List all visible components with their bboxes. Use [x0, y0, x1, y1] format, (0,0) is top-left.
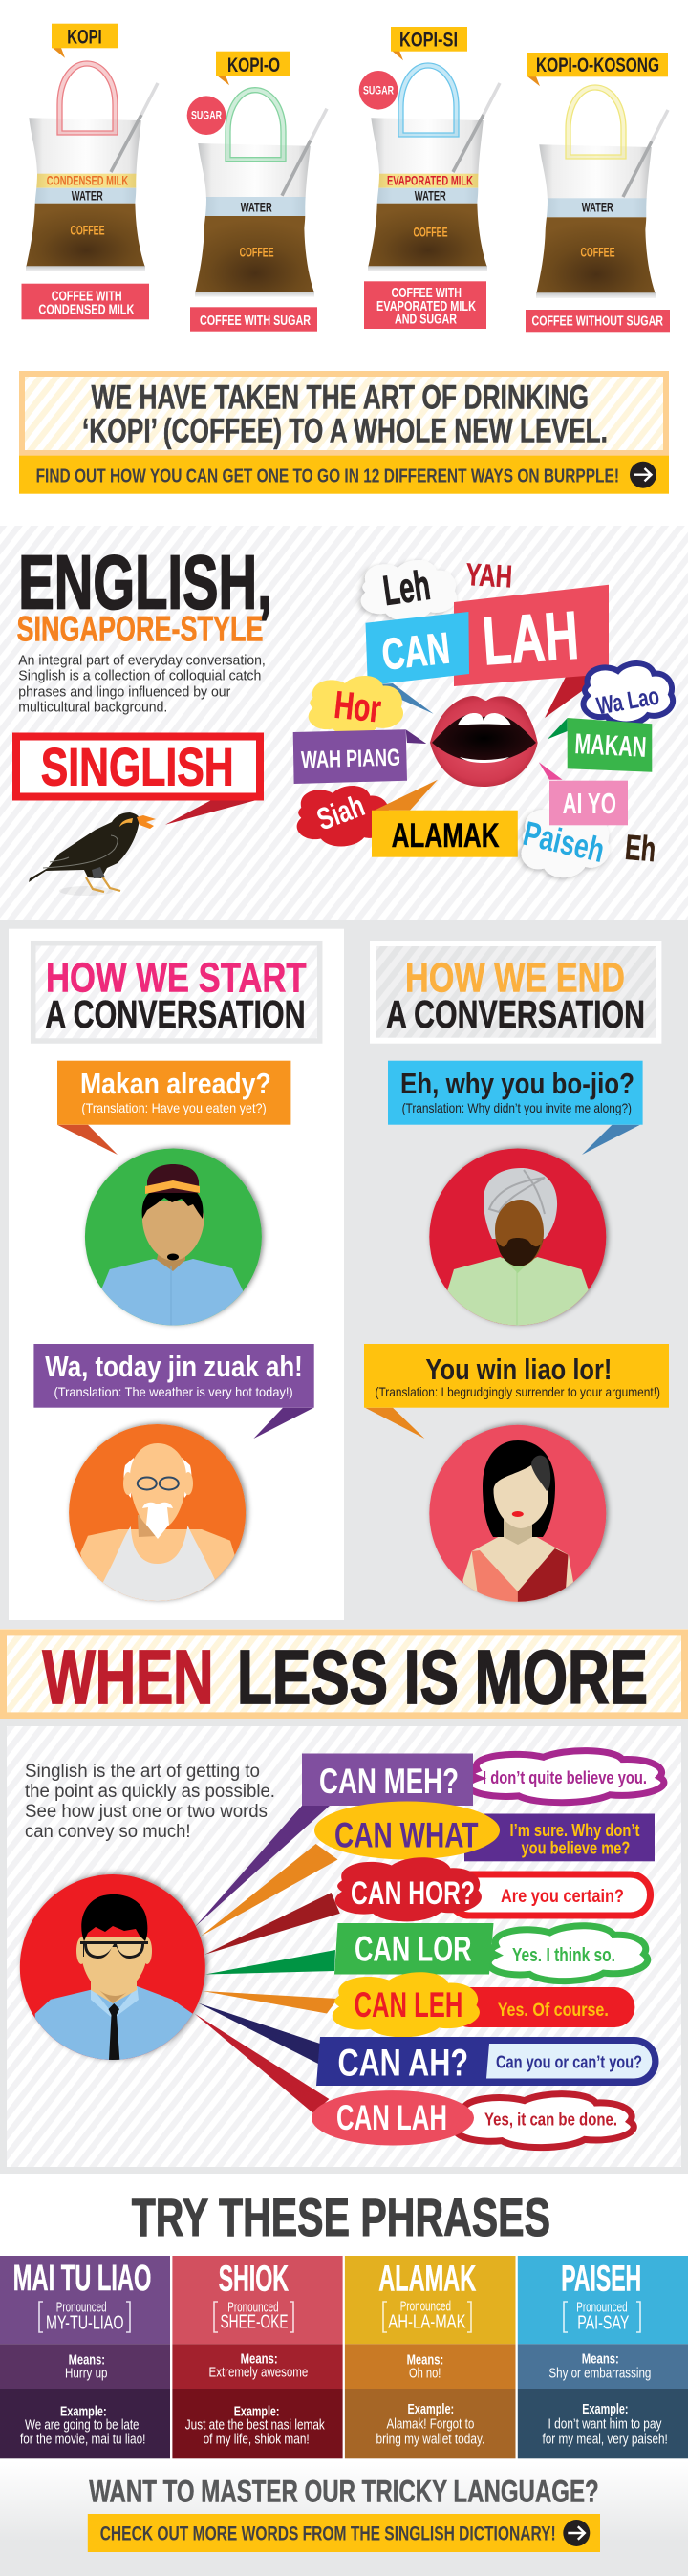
- phrase card: alamak: Alamak! Forgot to: [386, 2416, 474, 2433]
- heading: HOW WE START: [46, 954, 307, 1001]
- icon: myna bird: [29, 812, 156, 896]
- phrase card: mai tu liao: [0, 2256, 170, 2458]
- phrase: can ah: Can you or can’t you?: [496, 2053, 642, 2072]
- phrase card: shiok: Example:: [234, 2403, 279, 2419]
- phrase card: paiseh: PAI-SAY: [577, 2313, 629, 2334]
- icon: mouth: [430, 696, 538, 787]
- speech bubble: you win liao lor: [364, 1344, 669, 1439]
- phrase card: alamak: AH-LA-MAK: [388, 2312, 466, 2333]
- phrase card: mai tu liao: MAI TU LIAO: [13, 2259, 151, 2299]
- phrase: can leh: Yes. Of course.: [498, 2001, 609, 2021]
- phrase: can lor: CAN LOR: [355, 1930, 472, 1969]
- phrase: can meh: [302, 1751, 664, 1806]
- kopi drink: kopi-si: [359, 27, 500, 329]
- phrase: can ah: CAN AH?: [338, 2043, 468, 2085]
- portrait: woman: [429, 1425, 606, 1615]
- cloud: paiseh: [520, 805, 610, 877]
- panel: conversation background: [0, 920, 688, 1629]
- speech bubble: why you bo-jio: (Translation: Why didn’t you invite me along?): [402, 1100, 632, 1115]
- phrase card: shiok: SHIOK: [219, 2260, 289, 2300]
- box: wah piang: WAH PIANG: [301, 745, 400, 773]
- panel: how we end a conversation: [364, 943, 669, 1615]
- intro text: the point as quickly as possible.: [25, 1782, 275, 1802]
- tag: kopi-si: [391, 27, 467, 60]
- layer labels: EVAPORATED MILK: [387, 174, 473, 187]
- box: lah: [454, 585, 609, 718]
- cloud: wa lao: [583, 663, 673, 724]
- phrase card: paiseh: [518, 2256, 688, 2458]
- layer labels: WATER: [241, 201, 272, 214]
- speech bubble: wa today jin zuak ah: [33, 1344, 314, 1439]
- intro text: multicultural background.: [18, 700, 167, 715]
- tag: kopi: [52, 24, 118, 58]
- phrase card: mai tu liao: Hurry up: [65, 2365, 107, 2381]
- layer labels: COFFEE: [581, 245, 615, 260]
- word: eh: Eh: [623, 828, 657, 869]
- title: [17, 540, 272, 649]
- layer labels: WATER: [415, 189, 446, 203]
- headline: [42, 1634, 648, 1720]
- footer: [0, 2461, 688, 2576]
- phrase: can lor: [334, 1923, 648, 1981]
- icon: arrow: [630, 462, 656, 488]
- phrase card: paiseh: I don’t want him to pay: [548, 2416, 662, 2433]
- intro text: [25, 1762, 275, 1842]
- panel: how we start a conversation: [9, 929, 344, 1620]
- sugar: SUGAR: [191, 109, 222, 122]
- phrase card: mai tu liao: for the movie, mai tu liao!: [20, 2432, 145, 2448]
- phrase card: shiok: Extremely awesome: [208, 2365, 308, 2381]
- phrase: can meh: CAN MEH?: [319, 1762, 459, 1801]
- bag: [368, 83, 500, 271]
- cloud: hor: Hor: [333, 684, 383, 730]
- phrase card: paiseh: Example:: [582, 2401, 629, 2417]
- handle: [57, 61, 118, 135]
- cloud: leh: Leh: [380, 562, 433, 615]
- kopi drink: kopi-o: [187, 52, 327, 332]
- phrase card: shiok: Means:: [241, 2350, 278, 2367]
- phrase card: alamak: ALAMAK: [378, 2260, 477, 2300]
- phrase card: alamak: [345, 2256, 516, 2458]
- title: ENGLISH,: [18, 540, 272, 625]
- panel: english singapore-style: [0, 526, 688, 920]
- phrase: can what: I’m sure. Why don’t: [510, 1821, 639, 1840]
- call to action: [88, 2514, 600, 2552]
- phrase: can lah: Yes, it can be done.: [484, 2111, 617, 2130]
- layer labels: CONDENSED MILK: [47, 174, 128, 187]
- caption: COFFEE WITH SUGAR: [200, 314, 311, 329]
- sugar: SUGAR: [363, 83, 394, 97]
- phrase: can what: CAN WHAT: [334, 1816, 479, 1855]
- sugar: [359, 71, 398, 110]
- box: ai yo: [539, 762, 628, 825]
- speech bubble: why you bo-jio: [388, 1061, 643, 1155]
- phrase card: paiseh: Means:: [582, 2350, 619, 2367]
- phrase: can hor: [335, 1857, 650, 1921]
- box: makan: [548, 718, 652, 772]
- phrase card: alamak: Means:: [407, 2351, 443, 2368]
- intro text: Singlish is the art of getting to: [25, 1762, 260, 1782]
- box: makan: MAKAN: [574, 728, 647, 764]
- heading: try these phrases: TRY THESE PHRASES: [132, 2187, 550, 2247]
- phrase card: shiok: Just ate the best nasi lemak: [185, 2417, 325, 2434]
- layer labels: COFFEE: [413, 226, 447, 239]
- sugar: [187, 96, 226, 135]
- intro text: [18, 654, 266, 715]
- phrase: can leh: CAN LEH: [354, 1985, 462, 2024]
- phrase: can lor: Yes. I think so.: [512, 1945, 615, 1966]
- cloud: siah: Siah: [312, 788, 369, 836]
- intro text: Singlish is a collection of colloquial catch: [18, 669, 261, 684]
- box: can: [365, 612, 469, 714]
- kopi drink: kopi: [21, 24, 158, 319]
- portrait: man with turban: [429, 1149, 606, 1329]
- box: lah: LAH: [481, 598, 581, 680]
- heading: HOW WE END: [405, 954, 625, 1001]
- cloud: hor: [309, 676, 403, 736]
- tag: kopi-si: KOPI-SI: [399, 29, 458, 51]
- box: can: CAN: [379, 622, 452, 680]
- handle: [398, 63, 459, 137]
- box: alamak: ALAMAK: [392, 817, 500, 855]
- caption: COFFEE WITH: [52, 289, 122, 304]
- phrase: can ah: [316, 2037, 659, 2086]
- speech bubble: makan already: (Translation: Have you eaten yet?): [81, 1100, 267, 1115]
- layer labels: [581, 201, 615, 260]
- call to action: [19, 456, 669, 494]
- tag: kopi: KOPI: [67, 27, 102, 49]
- handle: [566, 85, 626, 159]
- phrase card: alamak: Pronounced: [400, 2299, 451, 2315]
- phrase card: mai tu liao: We are going to be late: [25, 2417, 140, 2434]
- banner headline: [82, 379, 608, 450]
- phrase card: alamak: Example:: [407, 2401, 454, 2417]
- phrase: can what: [314, 1801, 655, 1861]
- box: wah piang: [293, 729, 426, 784]
- cloud: wa lao: Wa Lao: [594, 681, 661, 721]
- layer labels: [387, 174, 473, 239]
- bag: [536, 110, 668, 298]
- banner: when less is more: [4, 1633, 684, 1720]
- phrase card: paiseh: Shy or embarrassing: [548, 2365, 651, 2381]
- layer labels: [47, 174, 128, 237]
- phrase: can leh: [333, 1972, 634, 2037]
- bag with condensed milk: [26, 83, 158, 271]
- intro text: can convey so much!: [25, 1822, 191, 1842]
- speech bubble: you win liao lor: You win liao lor!: [425, 1353, 612, 1386]
- tag: kopi-o: [216, 52, 290, 85]
- cloud: paiseh: Paiseh: [520, 813, 609, 870]
- phrase: can lah: CAN LAH: [336, 2098, 447, 2137]
- icon: arrow: [563, 2520, 590, 2546]
- heading: [33, 943, 320, 1041]
- cloud: leh: [361, 560, 457, 620]
- phrase card: mai tu liao: Example:: [60, 2403, 107, 2419]
- caption: COFFEE WITH: [392, 286, 462, 301]
- phrase: can hor: CAN HOR?: [351, 1875, 475, 1912]
- speech bubble: wa today jin zuak ah: Wa, today jin zuak ah!: [45, 1350, 303, 1383]
- phrase card: shiok: Pronounced: [227, 2299, 279, 2315]
- caption: [190, 307, 317, 332]
- speech bubble: why you bo-jio: Eh, why you bo-jio?: [400, 1067, 634, 1100]
- caption: [526, 310, 670, 332]
- speech bubble: makan already: Makan already?: [80, 1067, 271, 1100]
- speech bubble: makan already: [57, 1061, 290, 1155]
- heading: [373, 943, 658, 1041]
- portrait: man with songkok: [85, 1149, 262, 1329]
- caption: [21, 284, 149, 319]
- tag: kopi-o-kosong: [527, 53, 668, 86]
- phrase card: shiok: SHEE-OKE: [220, 2312, 289, 2333]
- singlish box: [16, 736, 264, 825]
- intro text: An integral part of everyday conversation,: [18, 654, 266, 669]
- layer labels: COFFEE: [240, 245, 274, 260]
- connector rays: [194, 1806, 340, 2113]
- panel: can phrases: [7, 1726, 681, 2167]
- portrait: man with glasses: [20, 1874, 205, 2065]
- caption: CONDENSED MILK: [38, 302, 135, 317]
- box: ai yo: AI YO: [563, 787, 616, 820]
- headline: WHEN: [42, 1634, 214, 1720]
- layer labels: COFFEE: [71, 224, 105, 237]
- intro text: phrases and lingo influenced by our: [18, 684, 230, 700]
- phrase card: mai tu liao: Means:: [69, 2351, 105, 2368]
- phrase card: paiseh: Pronounced: [576, 2299, 628, 2315]
- phrase card: alamak: bring my wallet today.: [376, 2432, 484, 2448]
- panel: less is more background: [0, 1719, 688, 2174]
- intro text: See how just one or two words: [25, 1802, 268, 1822]
- phrase card: mai tu liao: MY-TU-LIAO: [46, 2313, 124, 2334]
- caption: AND SUGAR: [395, 312, 457, 327]
- handle: [226, 88, 286, 162]
- phrase: can lah: [312, 2090, 634, 2148]
- portrait: old man: [69, 1424, 246, 1606]
- layer labels: WATER: [72, 189, 103, 203]
- cloud: siah: [297, 786, 390, 846]
- heading: A CONVERSATION: [45, 992, 306, 1036]
- tag: kopi-o: KOPI-O: [227, 54, 280, 76]
- phrase card: alamak: Oh no!: [409, 2365, 441, 2381]
- phrase card: shiok: of my life, shiok man!: [204, 2432, 310, 2448]
- phrase: can what: you believe me?: [522, 1838, 630, 1857]
- speech bubble: wa today jin zuak ah: (Translation: The weather is very hot today!): [54, 1384, 293, 1399]
- phrase: can meh: I don’t quite believe you.: [483, 1768, 647, 1787]
- word: yah: YAH: [465, 556, 513, 595]
- phrase card: shiok: [172, 2256, 343, 2458]
- caption: EVAPORATED MILK: [376, 299, 476, 314]
- title: SINGAPORE-STYLE: [17, 610, 264, 649]
- layer labels: WATER: [582, 201, 613, 214]
- phrase card: mai tu liao: Pronounced: [56, 2299, 107, 2315]
- singlish box: SINGLISH: [41, 737, 234, 797]
- box: alamak: [372, 780, 518, 857]
- caption: [364, 281, 486, 329]
- phrase: can hor: Are you certain?: [501, 1887, 624, 1907]
- kopi drink: kopi-o-kosong: [526, 53, 670, 332]
- banner: art of drinking kopi: [19, 374, 669, 494]
- bag: [195, 109, 327, 297]
- layer labels: [240, 201, 274, 260]
